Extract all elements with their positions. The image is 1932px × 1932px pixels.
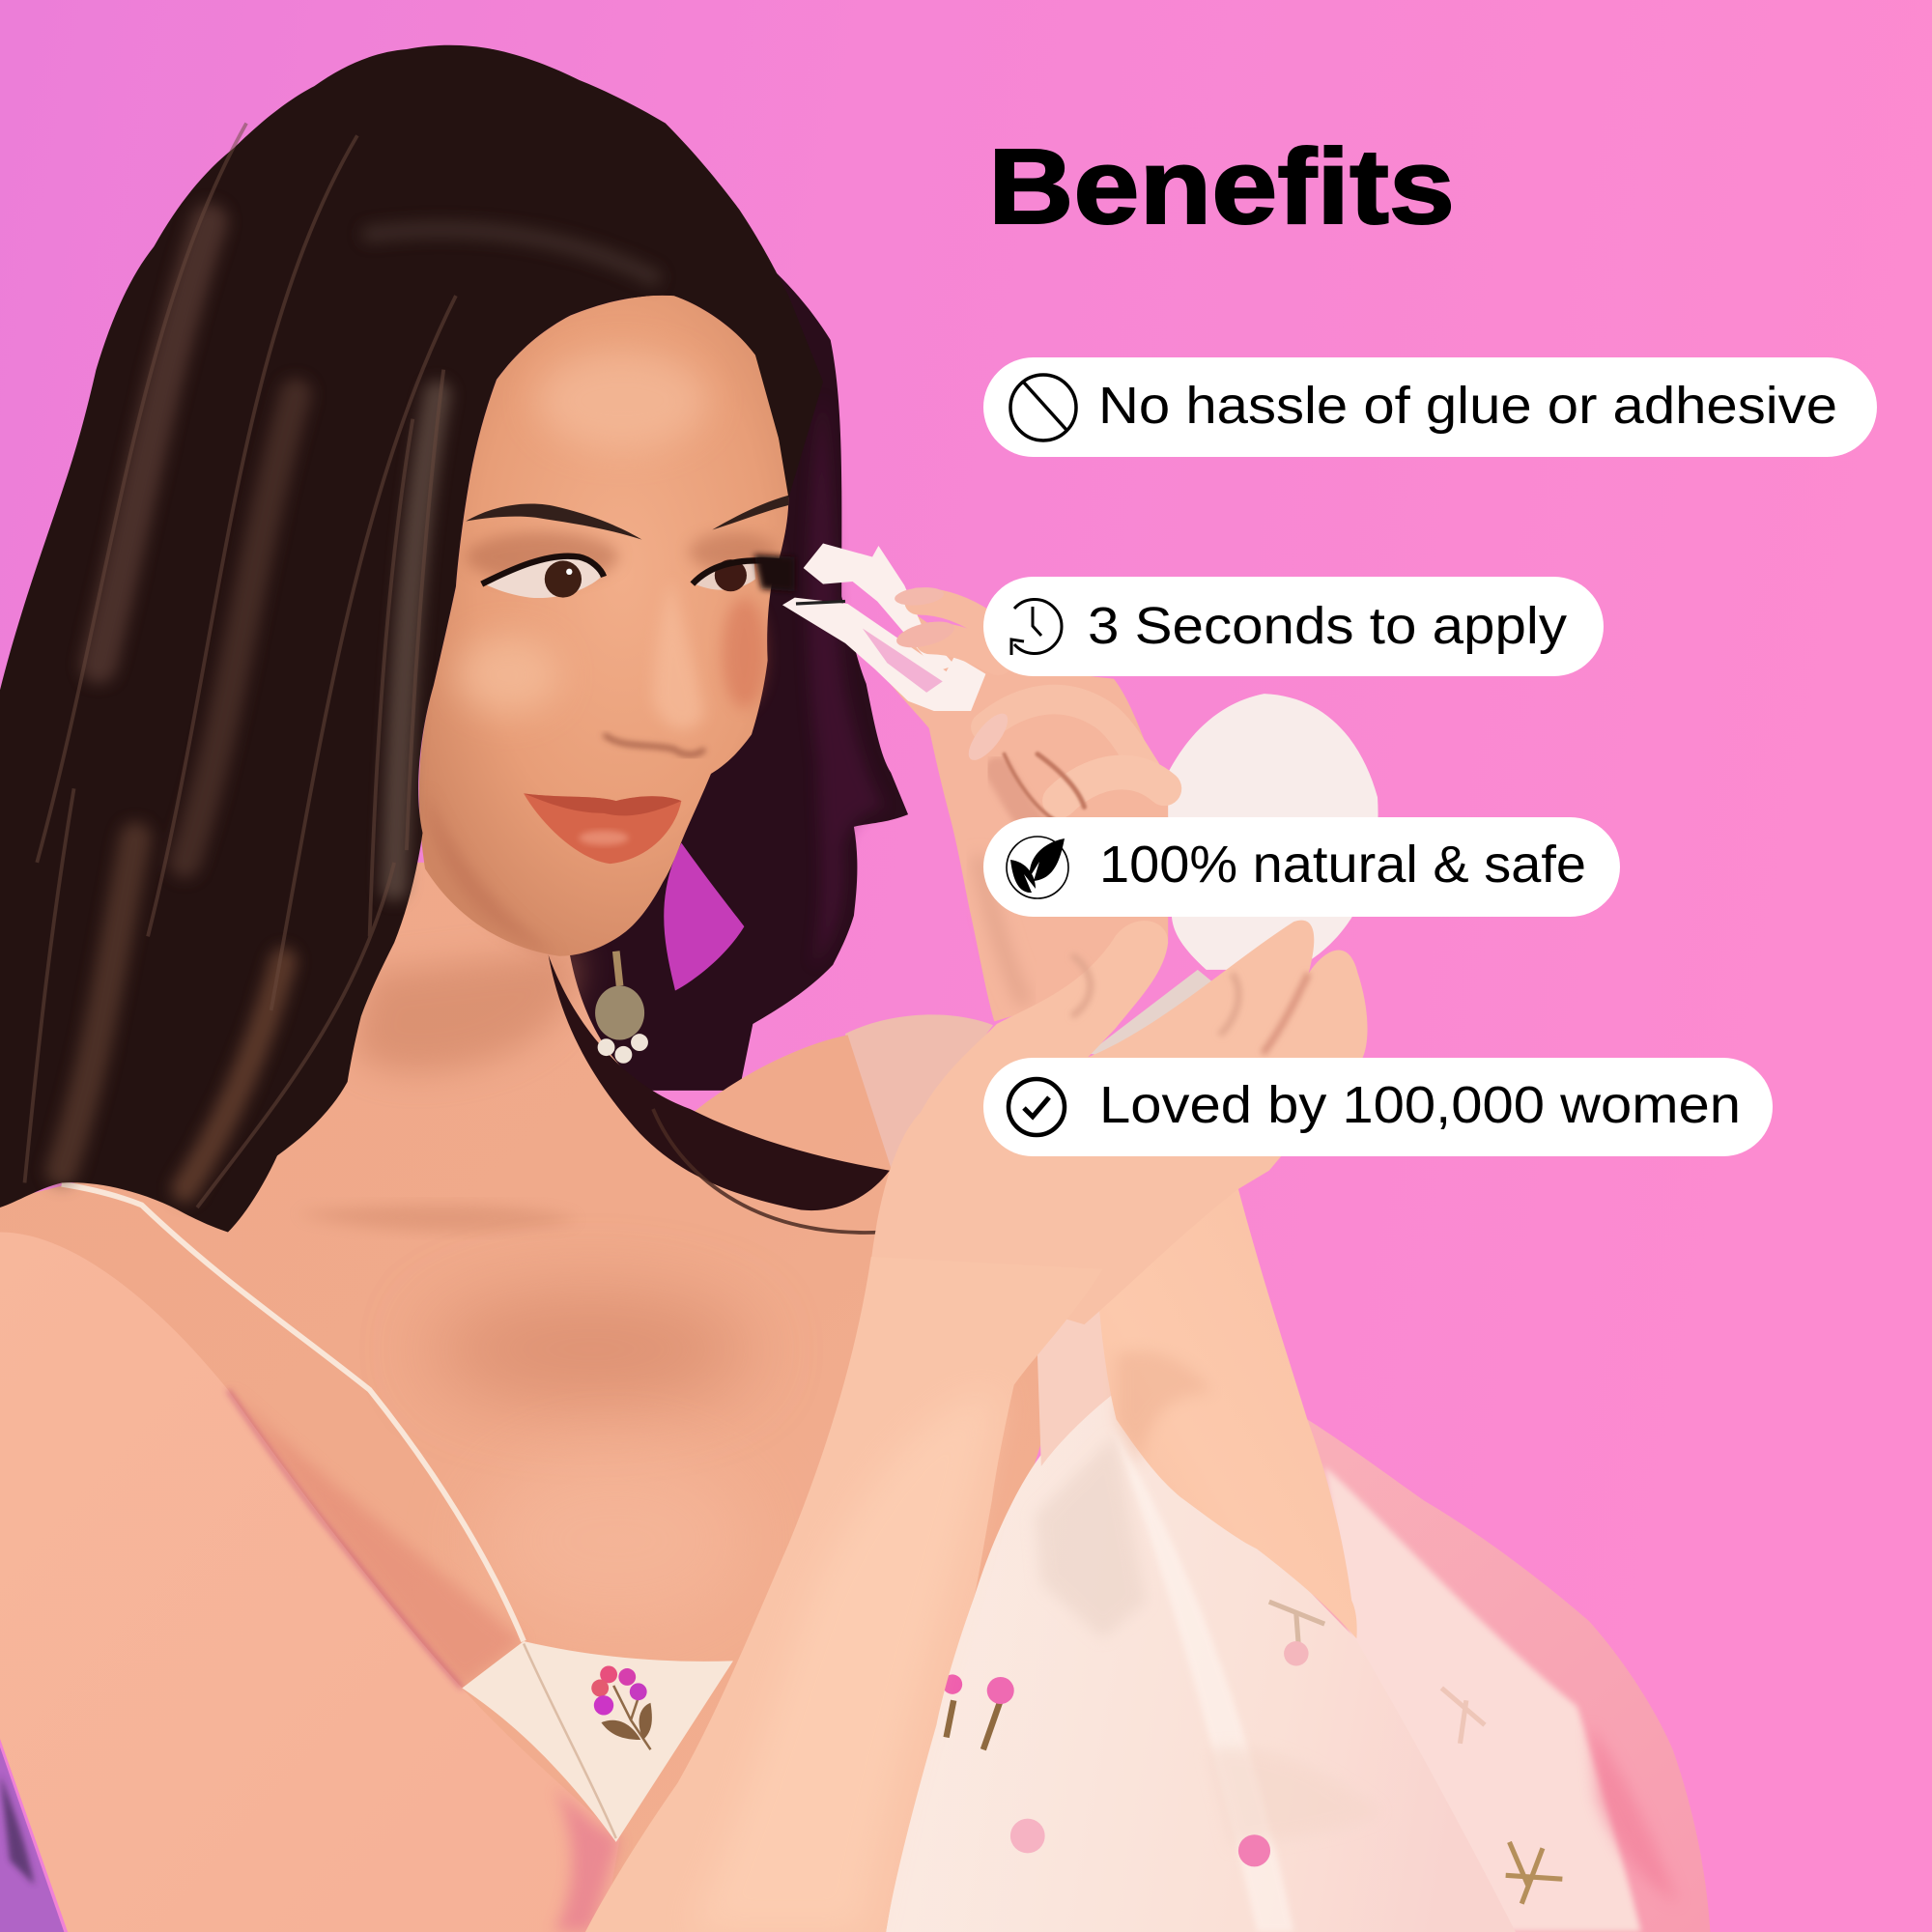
icon: clock with arrow [1011, 600, 1062, 655]
rosy torso sliver beside arm [228, 1390, 524, 1688]
chest highlight [480, 1454, 752, 1627]
icon: leaves in circle [1007, 837, 1068, 898]
see-through window [863, 629, 943, 693]
right eyebrow [712, 496, 788, 529]
icon: prohibited sign [1010, 375, 1076, 440]
forehead highlight [536, 352, 708, 450]
near forearm [585, 1257, 1103, 1932]
left arm [0, 1233, 620, 1932]
back hair [549, 185, 908, 1091]
finger shading [980, 699, 1164, 998]
upper hand [878, 616, 1168, 1021]
nostril [604, 734, 705, 754]
elbow rosy shade [554, 1786, 620, 1932]
fingers gripping tool [918, 601, 998, 659]
benefit pill: no hassle [983, 357, 1877, 457]
label: no hassle: No hassle of glue or adhesive [1098, 377, 1837, 435]
near hand [871, 921, 1368, 1324]
front hair [0, 45, 823, 1233]
hair lock across the chest [549, 955, 890, 1233]
chest shadow [431, 1293, 752, 1405]
label: three seconds: 3 Seconds to apply [1088, 597, 1567, 655]
benefit pill: natural [983, 817, 1620, 917]
label: loved by: Loved by 100,000 women [1099, 1076, 1741, 1134]
bottom-left background foliage [0, 1747, 64, 1932]
label: natural: 100% natural & safe [1099, 836, 1586, 894]
dress strap [62, 1184, 524, 1641]
far forearm [1096, 1189, 1357, 1638]
nails [894, 585, 1014, 766]
skirt embroidery [943, 1602, 1562, 1904]
earring [595, 952, 648, 1064]
eye socket shade [466, 532, 618, 582]
main front layer [886, 1388, 1516, 1932]
purple gap in hair [664, 842, 744, 991]
right eye [693, 559, 755, 590]
pink stain on back layer [1589, 1725, 1678, 1904]
hair highlights [62, 222, 653, 1189]
body skin [0, 863, 1084, 1932]
upper arm of tool [804, 543, 955, 671]
forearm highlight [690, 1392, 998, 1932]
magenta sheen in hair [808, 394, 885, 967]
cheek highlight [456, 636, 559, 715]
back pink layer [1109, 1388, 1710, 1932]
title: Benefits [988, 128, 1455, 246]
facial details [425, 352, 795, 956]
benefit pill: three seconds [983, 577, 1604, 676]
skirt organza [886, 1388, 1710, 1932]
dress bodice [462, 1641, 733, 1842]
sheer sleeve behind the hand [845, 1014, 993, 1189]
icon: check in circle [1009, 1079, 1065, 1135]
jaw shade [425, 788, 559, 956]
hair strands [25, 124, 456, 1208]
embroidered flower on bodice [591, 1665, 652, 1749]
benefit pill: loved by [983, 1058, 1773, 1156]
lips [524, 793, 681, 864]
right cheek redness [722, 598, 766, 708]
neck shadow [352, 949, 579, 1072]
sheer fold shadow [1035, 1435, 1146, 1638]
arm crease [228, 1390, 462, 1688]
left eyebrow [466, 503, 642, 540]
false lash [754, 554, 795, 591]
lower arm of tool [782, 598, 985, 711]
left eye [483, 556, 601, 598]
compact mirror [1088, 694, 1378, 1057]
nose highlight [653, 579, 705, 730]
collarbone shade [296, 1205, 579, 1232]
sheer sleeve lower between arms [1035, 1282, 1115, 1466]
lighter middle layer [1324, 1466, 1641, 1932]
lash applicator tool [782, 543, 985, 711]
face [419, 296, 788, 956]
